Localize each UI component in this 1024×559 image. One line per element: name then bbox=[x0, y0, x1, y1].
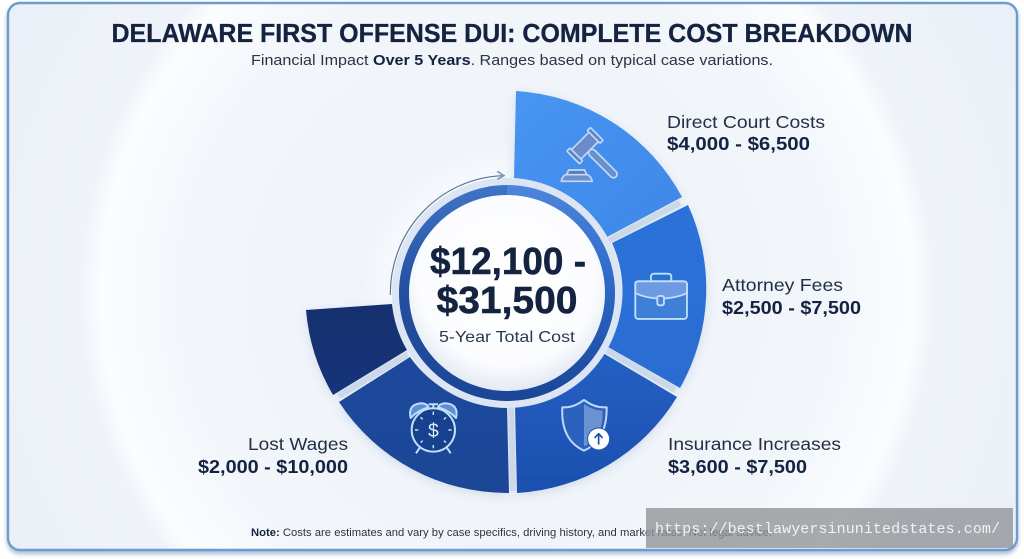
watermark bbox=[646, 508, 1013, 548]
icon: gavel bbox=[561, 128, 628, 189]
icon: alarm clock: $ bbox=[428, 421, 439, 442]
center total: $31,500 bbox=[436, 280, 578, 322]
arrow around center bbox=[390, 171, 504, 295]
icon: shield bbox=[562, 400, 610, 451]
label: direct court costs: $4,000 - $6,500 bbox=[667, 133, 810, 154]
footnote: Note: Costs are estimates and vary by case specifics, driving history, and market rates. Not legal advice. bbox=[251, 527, 772, 539]
center disc bbox=[409, 195, 605, 391]
icon: briefcase bbox=[635, 274, 687, 319]
title: DELAWARE FIRST OFFENSE DUI: COMPLETE COST BREAKDOWN bbox=[112, 20, 912, 48]
segment: lost wages bbox=[339, 357, 509, 493]
center ring bbox=[392, 178, 622, 408]
label: insurance increases bbox=[668, 434, 841, 477]
segment: dark unlabeled bbox=[306, 304, 407, 395]
label: attorney fees: Attorney Fees bbox=[722, 275, 843, 295]
watermark: https://bestlawyersinunitedstates.com/ bbox=[655, 521, 1000, 538]
segment gaps bbox=[339, 203, 680, 491]
donut chart bbox=[306, 91, 706, 493]
label: insurance increases: $3,600 - $7,500 bbox=[668, 456, 807, 477]
center total: $12,100 - bbox=[430, 241, 586, 283]
label: lost wages: $2,000 - $10,000 bbox=[198, 456, 348, 477]
label: direct court costs: Direct Court Costs bbox=[667, 112, 825, 132]
label: attorney fees: $2,500 - $7,500 bbox=[722, 297, 861, 318]
icon: alarm clock bbox=[410, 403, 457, 453]
segment: attorney fees bbox=[608, 205, 706, 388]
segment: direct court costs bbox=[514, 91, 682, 237]
label: lost wages: Lost Wages bbox=[248, 434, 348, 454]
center total bbox=[430, 241, 586, 346]
label: insurance increases: Insurance Increases bbox=[668, 434, 841, 454]
label: direct court costs bbox=[667, 112, 825, 154]
label: attorney fees bbox=[722, 275, 861, 318]
segment: insurance increases bbox=[515, 353, 677, 493]
subtitle: Financial Impact Over 5 Years . Ranges based on typical case variations. bbox=[251, 53, 773, 69]
label: lost wages bbox=[198, 434, 348, 477]
center total: 5-Year Total Cost bbox=[439, 329, 576, 346]
